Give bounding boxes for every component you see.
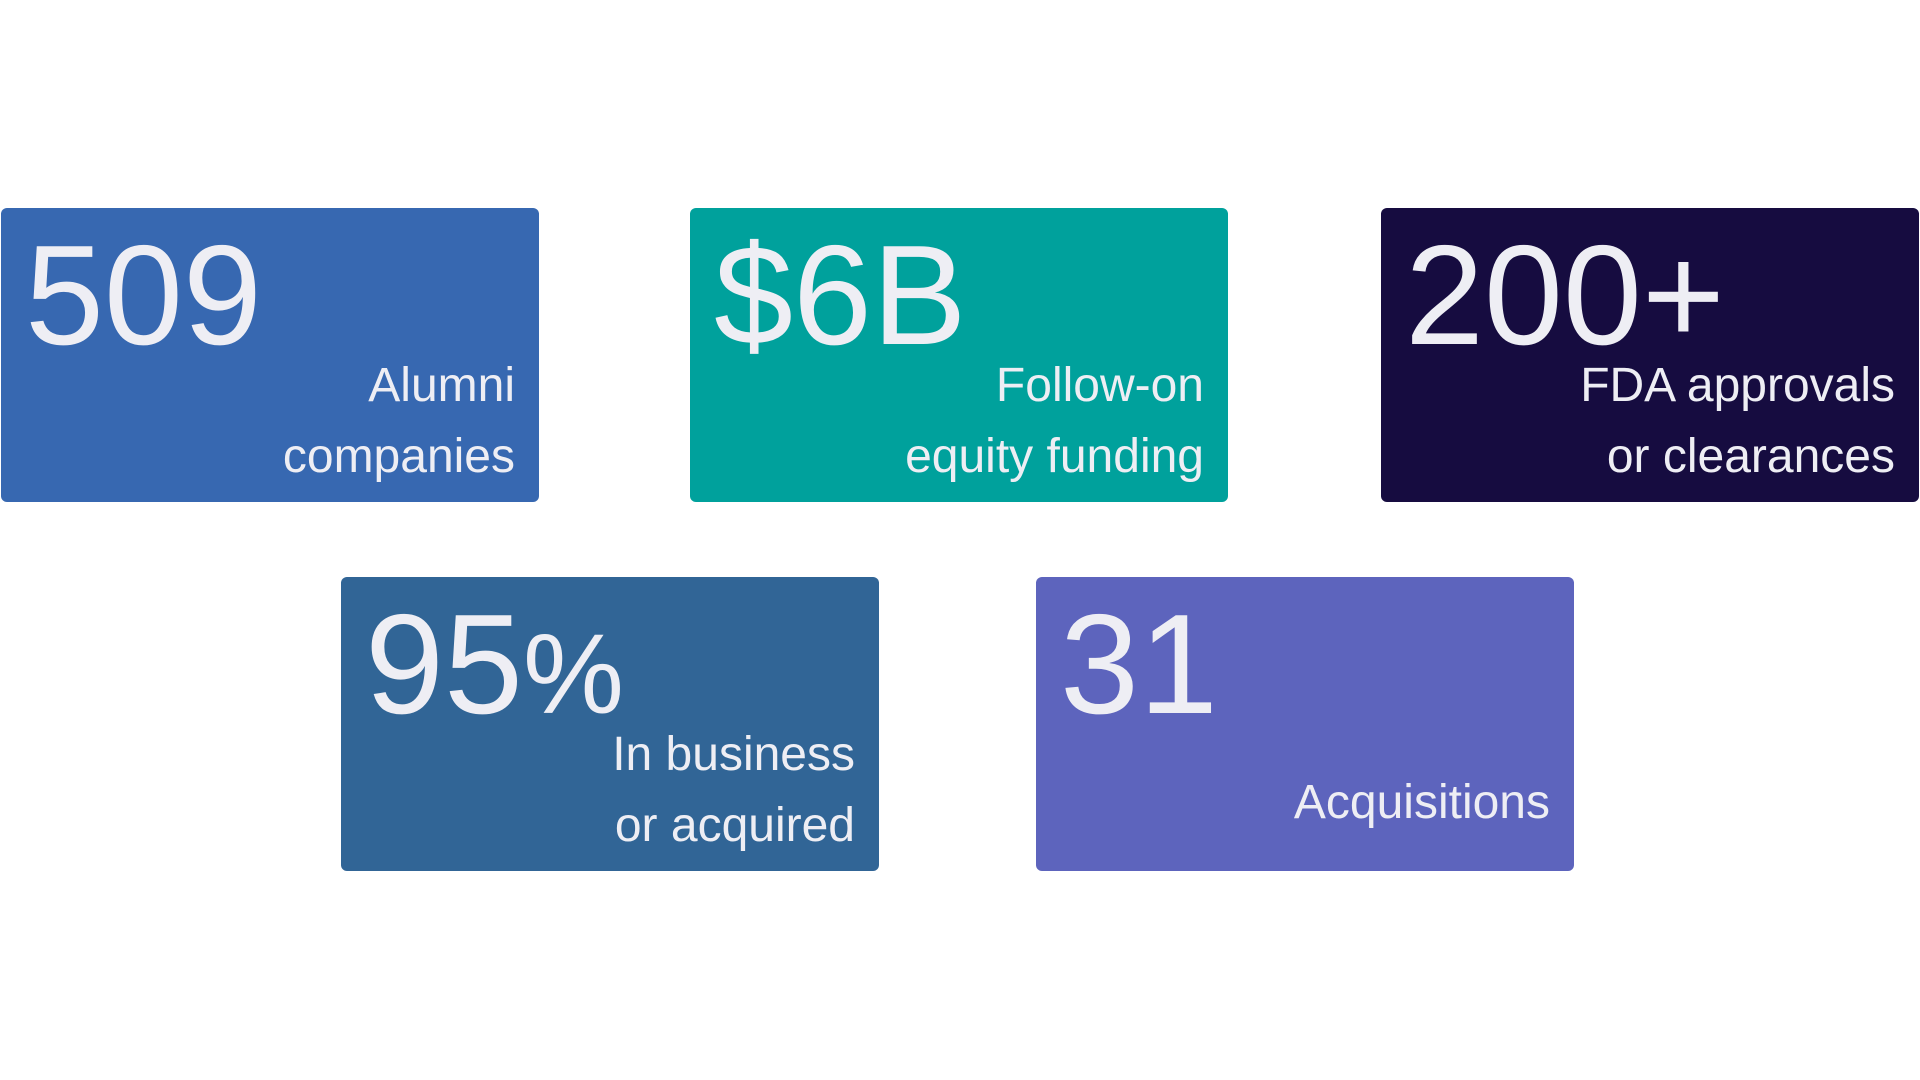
- big number: $6B: $6B: [714, 216, 967, 375]
- card: FDA approvals: [1381, 208, 1919, 502]
- card: acquisitions: [1036, 577, 1574, 871]
- label: in business or acquired: [612, 728, 855, 852]
- label: in business or acquired: In business: [612, 728, 855, 781]
- label: in business or acquired: or acquired: [615, 799, 855, 852]
- label: FDA approvals or clearances: [1580, 359, 1895, 483]
- label: acquisitions: Acquisitions: [1294, 776, 1550, 829]
- big number: 95%: 95%: [365, 585, 624, 744]
- label: follow-on equity funding: [905, 359, 1204, 483]
- card: in business or acquired: [341, 577, 879, 871]
- label: FDA approvals or clearances: or clearances: [1607, 430, 1895, 483]
- label: follow-on equity funding: equity funding: [905, 430, 1204, 483]
- label: alumni companies: Alumni: [368, 359, 515, 412]
- label: alumni companies: companies: [283, 430, 515, 483]
- big number: 200+: 200+: [1405, 216, 1725, 375]
- card: follow-on equity funding: [690, 208, 1228, 502]
- label: FDA approvals or clearances: FDA approvals: [1580, 359, 1895, 412]
- label: alumni companies: [283, 359, 515, 483]
- card: alumni companies: [1, 208, 539, 502]
- big number: 509: 509: [25, 216, 262, 375]
- label: follow-on equity funding: Follow-on: [996, 359, 1204, 412]
- big number: 31: 31: [1060, 585, 1218, 744]
